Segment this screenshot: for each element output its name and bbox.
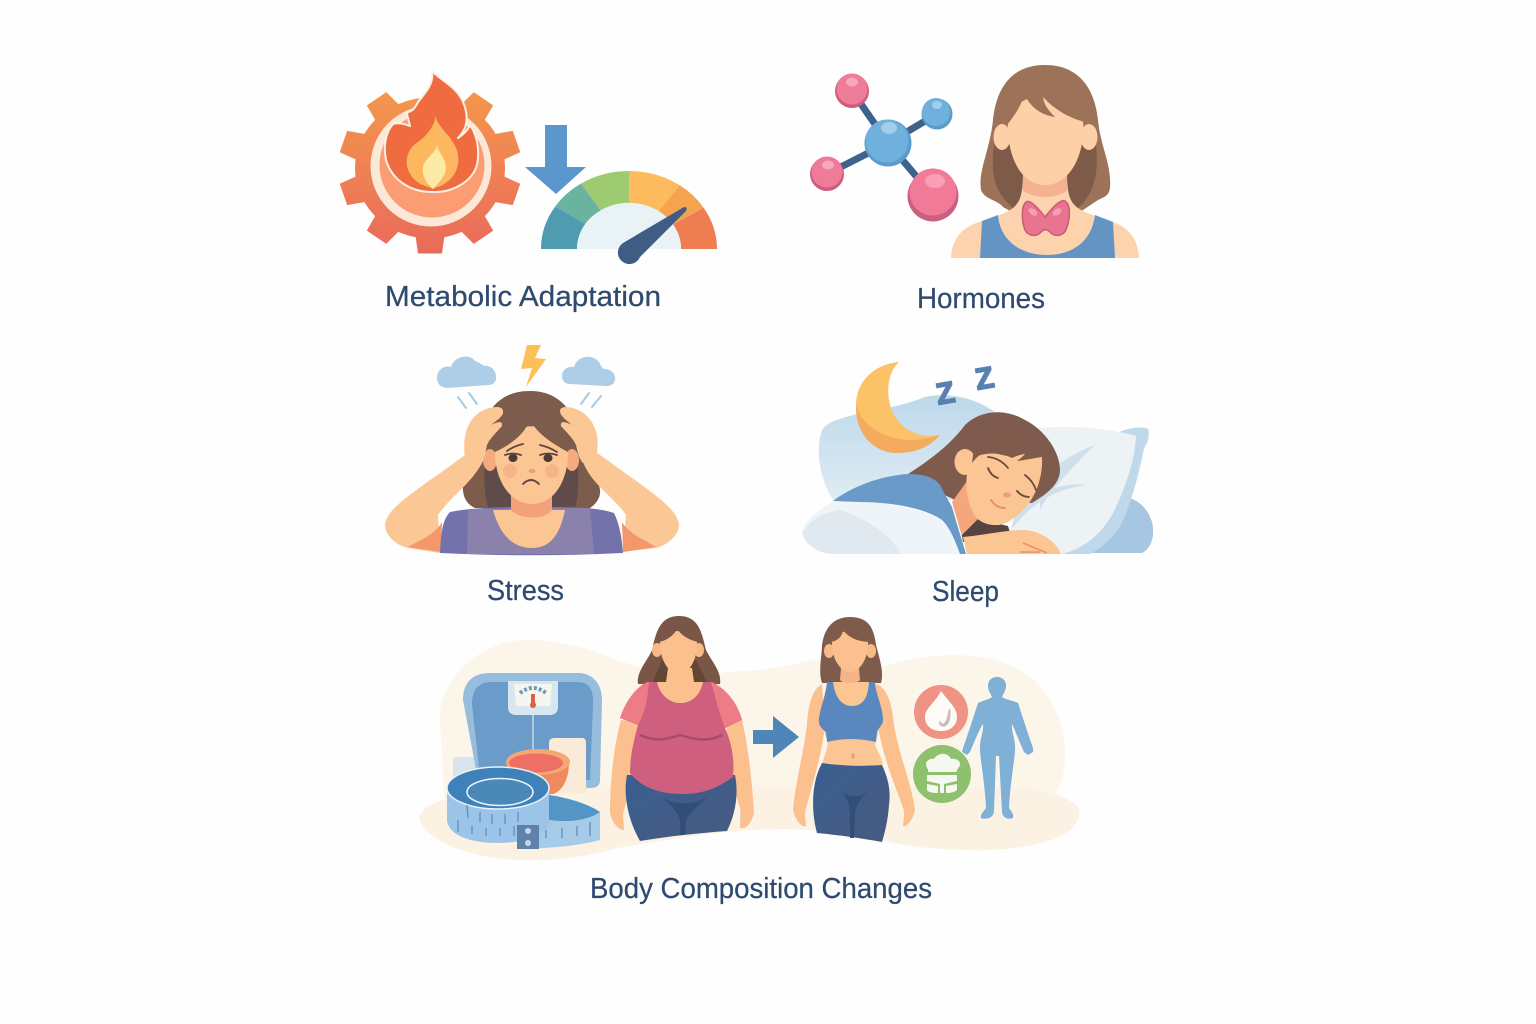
label: metabolic adaptation: Metabolic Adaptation <box>385 281 661 313</box>
blanket <box>802 474 966 554</box>
sleeping woman <box>905 412 1061 554</box>
icon: body silhouette <box>962 677 1033 819</box>
icon: lightning bolt <box>521 345 546 387</box>
leggings <box>813 763 890 842</box>
right hand <box>560 407 598 463</box>
blue blob under pillow <box>1055 498 1153 553</box>
icon: cloud left <box>437 357 496 388</box>
illustration: woman with thyroid <box>951 65 1139 258</box>
pillow <box>1000 427 1149 554</box>
snore letters: Z <box>973 361 997 397</box>
background cloud <box>819 395 1040 500</box>
label: hormones: Hormones <box>917 283 1045 315</box>
figure: larger woman <box>610 616 754 841</box>
gauge needle <box>618 207 687 264</box>
sports bra <box>819 682 883 742</box>
chart: speedometer gauge <box>541 171 717 264</box>
snore letters: Z <box>934 376 957 412</box>
label: body composition changes: Body Composition Changes <box>590 873 932 905</box>
panel: hormones <box>810 65 1139 315</box>
label: sleep: Sleep <box>932 576 999 608</box>
icon: fat drop <box>914 685 968 739</box>
figure: slimmer woman <box>793 617 915 842</box>
icon: box <box>549 738 586 793</box>
panel: sleep <box>802 361 1153 608</box>
shirt <box>620 682 742 794</box>
rain lines <box>458 393 601 408</box>
icon: thyroid gland <box>1022 201 1069 235</box>
arm <box>963 530 1061 554</box>
icon: gear <box>340 92 520 254</box>
icon: weighing scale <box>453 673 602 788</box>
icon: cloud right <box>562 357 615 386</box>
snore letters <box>934 361 997 412</box>
icon: muscle <box>913 745 971 803</box>
trousers <box>626 775 737 841</box>
arrow: transformation <box>753 716 799 758</box>
label: stress: Stress <box>487 575 564 607</box>
left hand <box>464 407 503 465</box>
background blob <box>419 640 1079 860</box>
panel: stress <box>385 345 679 607</box>
illustration: stressed woman <box>385 391 679 555</box>
arms <box>793 684 825 826</box>
neck <box>657 668 703 703</box>
panel: body composition changes <box>419 616 1079 905</box>
icon: molecule <box>810 74 958 222</box>
icon: bowl <box>506 749 570 794</box>
arrow: decrease <box>525 125 586 194</box>
torso <box>820 682 883 765</box>
icon: measuring tape <box>447 767 600 849</box>
icon: flame <box>385 71 478 192</box>
icon: crescent moon <box>856 362 940 453</box>
arms <box>610 720 638 830</box>
panel: metabolic adaptation <box>330 70 717 313</box>
